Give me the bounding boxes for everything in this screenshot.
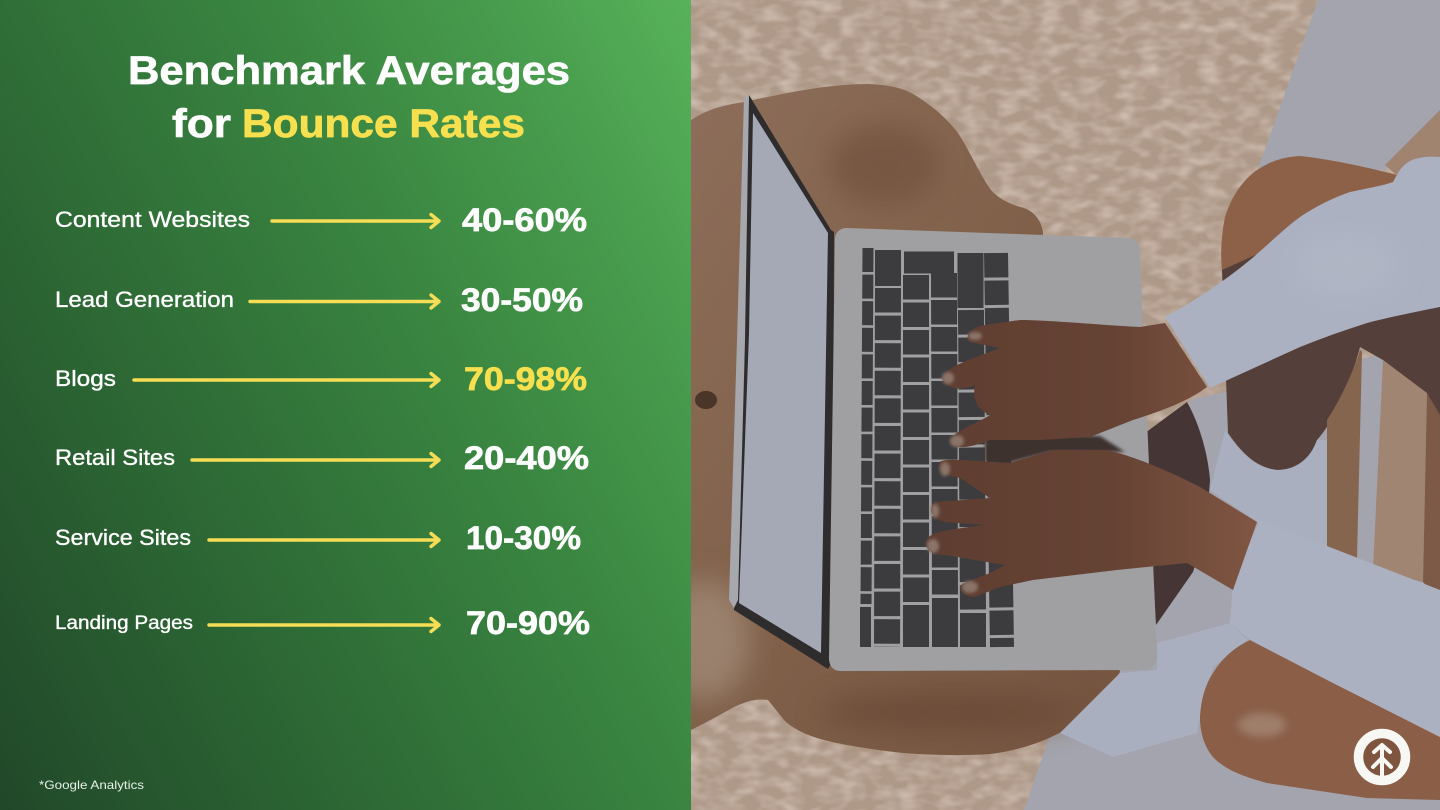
lower hand xyxy=(926,450,1257,597)
upper sock xyxy=(1210,430,1327,555)
lower knee xyxy=(1200,640,1440,800)
dark table edge behind hands xyxy=(1145,402,1210,625)
title: for xyxy=(172,102,231,146)
panel: green benchmark list xyxy=(0,0,691,810)
shadow between the hands xyxy=(985,432,1125,464)
wood piece top right xyxy=(1385,110,1440,180)
panel: photo of hands typing on a laptop xyxy=(691,0,1440,810)
upper sleeve xyxy=(1165,157,1440,388)
row: content websites: 40-60% xyxy=(462,202,587,238)
keyboard xyxy=(866,248,1002,647)
row: retail sites: 20-40% xyxy=(464,440,589,476)
title: Bounce Rates xyxy=(242,102,525,146)
upper hand xyxy=(942,320,1207,447)
chair legs xyxy=(1327,350,1440,600)
sleeve highlight xyxy=(1295,237,1395,293)
fingertips xyxy=(927,332,982,593)
row: service sites xyxy=(55,520,581,556)
knee highlight xyxy=(1238,713,1286,737)
wood shading xyxy=(660,125,1080,730)
title xyxy=(128,49,570,146)
laptop base xyxy=(829,228,1157,671)
dark thigh xyxy=(1222,190,1440,470)
row: service sites: Service Sites xyxy=(55,525,191,550)
laptop screen xyxy=(729,95,834,669)
row: blogs: 70-98% xyxy=(464,361,587,397)
row: blogs: Blogs xyxy=(55,366,116,391)
upper leg xyxy=(1221,156,1400,300)
row: content websites: Content Websites xyxy=(55,207,250,232)
row: landing pages xyxy=(55,605,590,641)
row: landing pages: 70-90% xyxy=(466,605,590,641)
logo: tree in ring xyxy=(1358,734,1406,780)
wood knot xyxy=(695,391,717,409)
row: lead generation: 30-50% xyxy=(461,282,583,318)
row: retail sites xyxy=(55,440,589,476)
row: landing pages: Landing Pages xyxy=(55,613,193,634)
floor areas xyxy=(1024,0,1440,810)
footnote: *Google Analytics xyxy=(39,778,144,792)
rug background xyxy=(691,0,1440,810)
row: blogs xyxy=(55,361,587,397)
row: content websites xyxy=(55,202,587,238)
title: Benchmark Averages xyxy=(128,49,570,93)
row: lead generation xyxy=(55,282,583,318)
row: service sites: 10-30% xyxy=(466,520,581,556)
row: lead generation: Lead Generation xyxy=(55,287,234,312)
wooden table xyxy=(691,84,1120,755)
lower sleeve xyxy=(1230,520,1440,737)
row: retail sites: Retail Sites xyxy=(55,445,175,470)
lower sock xyxy=(1060,623,1248,757)
